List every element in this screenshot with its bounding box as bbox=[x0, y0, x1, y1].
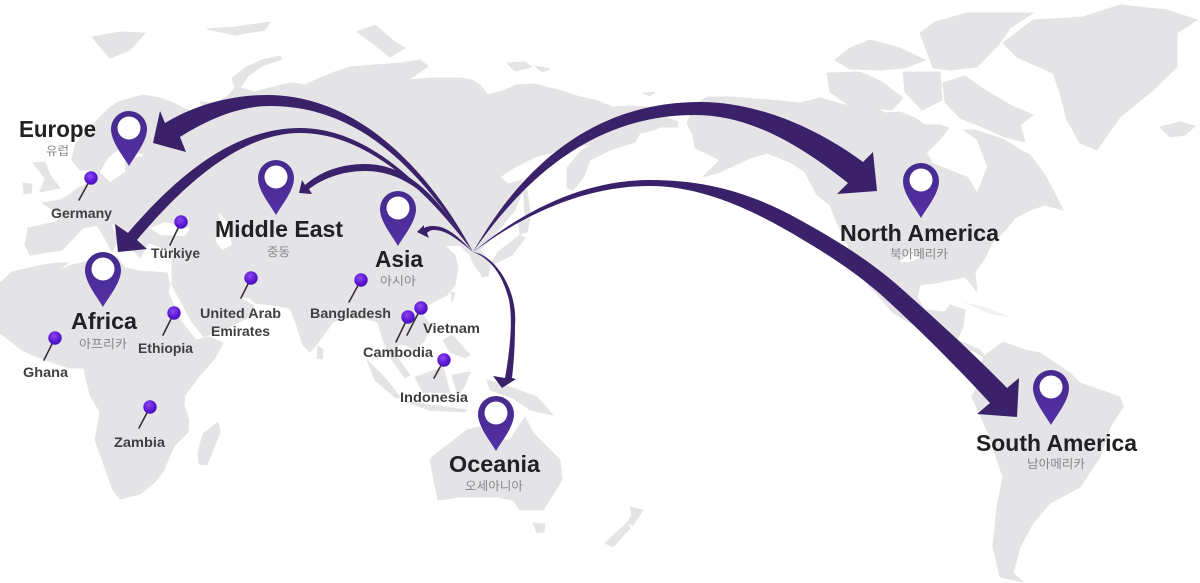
heading: Oceania: Oceania bbox=[449, 451, 540, 477]
icon: Europe location pin bbox=[111, 111, 147, 166]
country marker: Türkiye bbox=[151, 215, 200, 261]
country marker: Indonesia bbox=[400, 353, 468, 405]
label: Asia Korean: 아시아 bbox=[380, 274, 416, 288]
arrow: to Middle East bbox=[299, 164, 473, 252]
label: North America Korean: 북아메리카 bbox=[890, 247, 948, 261]
landmass: Australia bbox=[430, 417, 562, 510]
region: South America bbox=[976, 370, 1137, 471]
country marker: Ethiopia bbox=[138, 306, 193, 356]
arrow: to South America bbox=[473, 180, 1019, 417]
country marker: Ghana bbox=[23, 331, 68, 380]
icon: Africa location pin bbox=[85, 252, 121, 307]
icon: South America location pin bbox=[1033, 370, 1069, 425]
region: Asia bbox=[375, 191, 423, 288]
label: Europe Korean: 유럽 bbox=[46, 144, 69, 158]
heading: South America: South America bbox=[976, 430, 1137, 456]
country marker: Ghana: Ghana bbox=[23, 364, 68, 380]
heading: Europe: Europe bbox=[19, 116, 96, 142]
region: Oceania bbox=[449, 396, 540, 493]
heading: Africa: Africa bbox=[71, 308, 137, 334]
caribbean islands bbox=[963, 302, 1013, 318]
country marker: Germany: Germany bbox=[51, 205, 112, 221]
region: Europe bbox=[19, 111, 147, 166]
country marker: Ethiopia: Ethiopia bbox=[138, 340, 193, 356]
label: Oceania Korean: 오세아니아 bbox=[465, 479, 523, 493]
country marker: United Arab Emirates: Emirates bbox=[211, 323, 270, 339]
heading: Middle East: Middle East bbox=[215, 216, 343, 242]
icon: Middle East location pin bbox=[258, 160, 294, 215]
country marker: Indonesia: Indonesia bbox=[400, 389, 468, 405]
icon: Asia location pin bbox=[380, 191, 416, 246]
country marker: Zambia: Zambia bbox=[114, 434, 165, 450]
arrow: to Europe bbox=[153, 95, 473, 252]
country marker: Vietnam: Vietnam bbox=[423, 320, 480, 336]
landmass: Greenland bbox=[1003, 5, 1197, 150]
region: Africa bbox=[71, 252, 137, 351]
arrow: to Africa bbox=[115, 128, 473, 252]
landmass: Africa bbox=[0, 257, 223, 499]
country marker: Bangladesh bbox=[310, 273, 391, 321]
country marker: Bangladesh: Bangladesh bbox=[310, 305, 391, 321]
country marker: Zambia bbox=[114, 400, 165, 450]
country marker: United Arab Emirates: United Arab bbox=[200, 305, 281, 321]
landmass: Eurasia bbox=[25, 56, 678, 378]
label: Africa Korean: 아프리카 bbox=[79, 337, 127, 351]
country marker: United Arab Emirates bbox=[200, 271, 281, 339]
arrow: to North America bbox=[473, 102, 877, 252]
inland seas and bays bbox=[60, 122, 987, 270]
flow arrows bbox=[115, 95, 1019, 417]
country marker: Cambodia: Cambodia bbox=[363, 344, 433, 360]
heading: Asia: Asia bbox=[375, 246, 423, 272]
country marker: Germany bbox=[51, 171, 112, 221]
region: North America bbox=[840, 163, 999, 261]
country marker: Türkiye: Türkiye bbox=[151, 245, 200, 261]
label: South America Korean: 남아메리카 bbox=[1027, 457, 1085, 471]
arrow: to Asia bbox=[417, 225, 473, 252]
region: Middle East bbox=[215, 160, 343, 259]
heading: North America: North America bbox=[840, 220, 999, 246]
label: Middle East Korean: 중동 bbox=[267, 245, 290, 259]
icon: North America location pin bbox=[903, 163, 939, 218]
arrow: to Oceania bbox=[473, 252, 516, 388]
landmass: South America bbox=[972, 342, 1123, 582]
icon: Oceania location pin bbox=[478, 396, 514, 451]
landmass: North America bbox=[687, 97, 1063, 358]
country marker: Cambodia bbox=[363, 310, 433, 360]
country marker: Vietnam bbox=[407, 301, 480, 336]
